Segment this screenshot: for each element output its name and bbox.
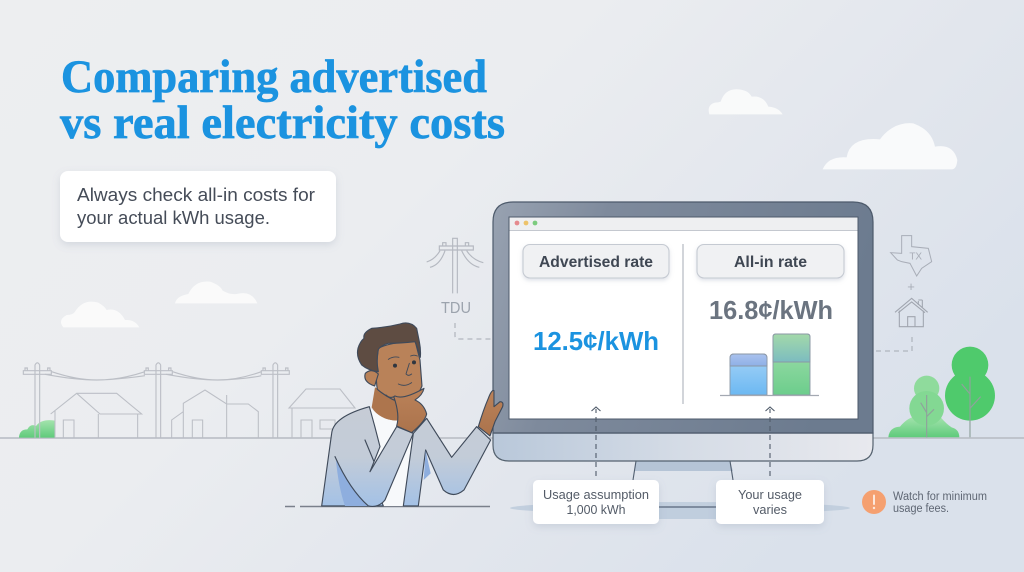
callout: your usage varies: Your usage [738,487,802,502]
dashed connector: TDU to monitor [455,323,493,339]
divider [682,244,684,404]
value: all-in 16.8 cents: 16.8¢/kWh [709,295,833,325]
callout: always check all-in costs [60,171,336,242]
near arm [335,427,413,506]
monitor bezel [493,202,873,433]
hair [357,323,421,372]
house 2 [172,390,258,438]
arrow: your usage to all-in rate [766,407,774,476]
house 1 [51,393,142,438]
arrow: usage assumption to advertised rate [592,407,600,476]
cloud: top centre [709,89,783,114]
desk line [285,506,490,508]
title [60,51,505,149]
tree: large [945,347,995,437]
icon: TDU power pole [427,238,483,293]
shirt [363,407,415,506]
icon: house [895,298,928,327]
torso shadow [336,460,368,506]
ear [365,371,378,386]
ground line [0,437,1024,439]
callout: your usage varies [716,480,824,524]
value: advertised 12.5 cents: 12.5¢/kWh [533,326,659,356]
callout: always check all-in costs: your actual kWh usage. [77,208,270,228]
cloud: left upper [175,281,257,303]
cloud: left lower [61,302,139,327]
monitor stand [633,461,733,480]
pill: advertised rate: Advertised rate [539,254,653,271]
label: TDU: TDU [441,300,471,317]
bush: left [19,420,55,438]
title: Comparing advertised [61,51,487,103]
icon: Texas state: TX [909,251,922,262]
cloud: top right [823,123,957,169]
smile [398,383,412,385]
monitor [493,202,873,461]
icon: Texas state [891,236,932,276]
plus sign: + [907,279,915,294]
torso left [322,407,383,506]
hand on monitor [478,390,503,436]
callout: usage assumption [533,480,659,524]
hand on chin [386,388,427,433]
title: vs real electricity costs [60,97,505,149]
browser title bar [510,218,858,230]
far arm shadow [424,451,431,480]
pill: all-in rate: All-in rate [734,254,807,271]
callout: usage assumption: 1,000 kWh [566,502,626,517]
dashed connector: house to chart [815,337,912,351]
icon: warning [862,490,886,514]
tree: small [888,376,959,437]
eyes [393,364,397,368]
far arm [403,418,491,506]
neck [372,387,402,421]
monitor base [510,502,850,519]
brows and nose [388,355,417,375]
monitor chin [493,433,873,461]
house 3 [289,389,355,438]
callout: usage assumption: Usage assumption [543,487,649,502]
warning note [893,491,987,515]
pill: advertised rate [523,244,669,278]
person thinking [322,323,503,506]
callout: your usage varies: varies [753,502,787,517]
stacked bar chart [720,334,819,396]
head [376,341,422,403]
callout: always check all-in costs: Always check all-in costs for [77,185,315,205]
warning note: Watch for minimum [893,491,987,503]
monitor screen [509,217,858,419]
warning note: usage fees. [893,503,949,515]
pill: all-in rate [697,244,844,278]
utility poles and wires [23,363,289,438]
